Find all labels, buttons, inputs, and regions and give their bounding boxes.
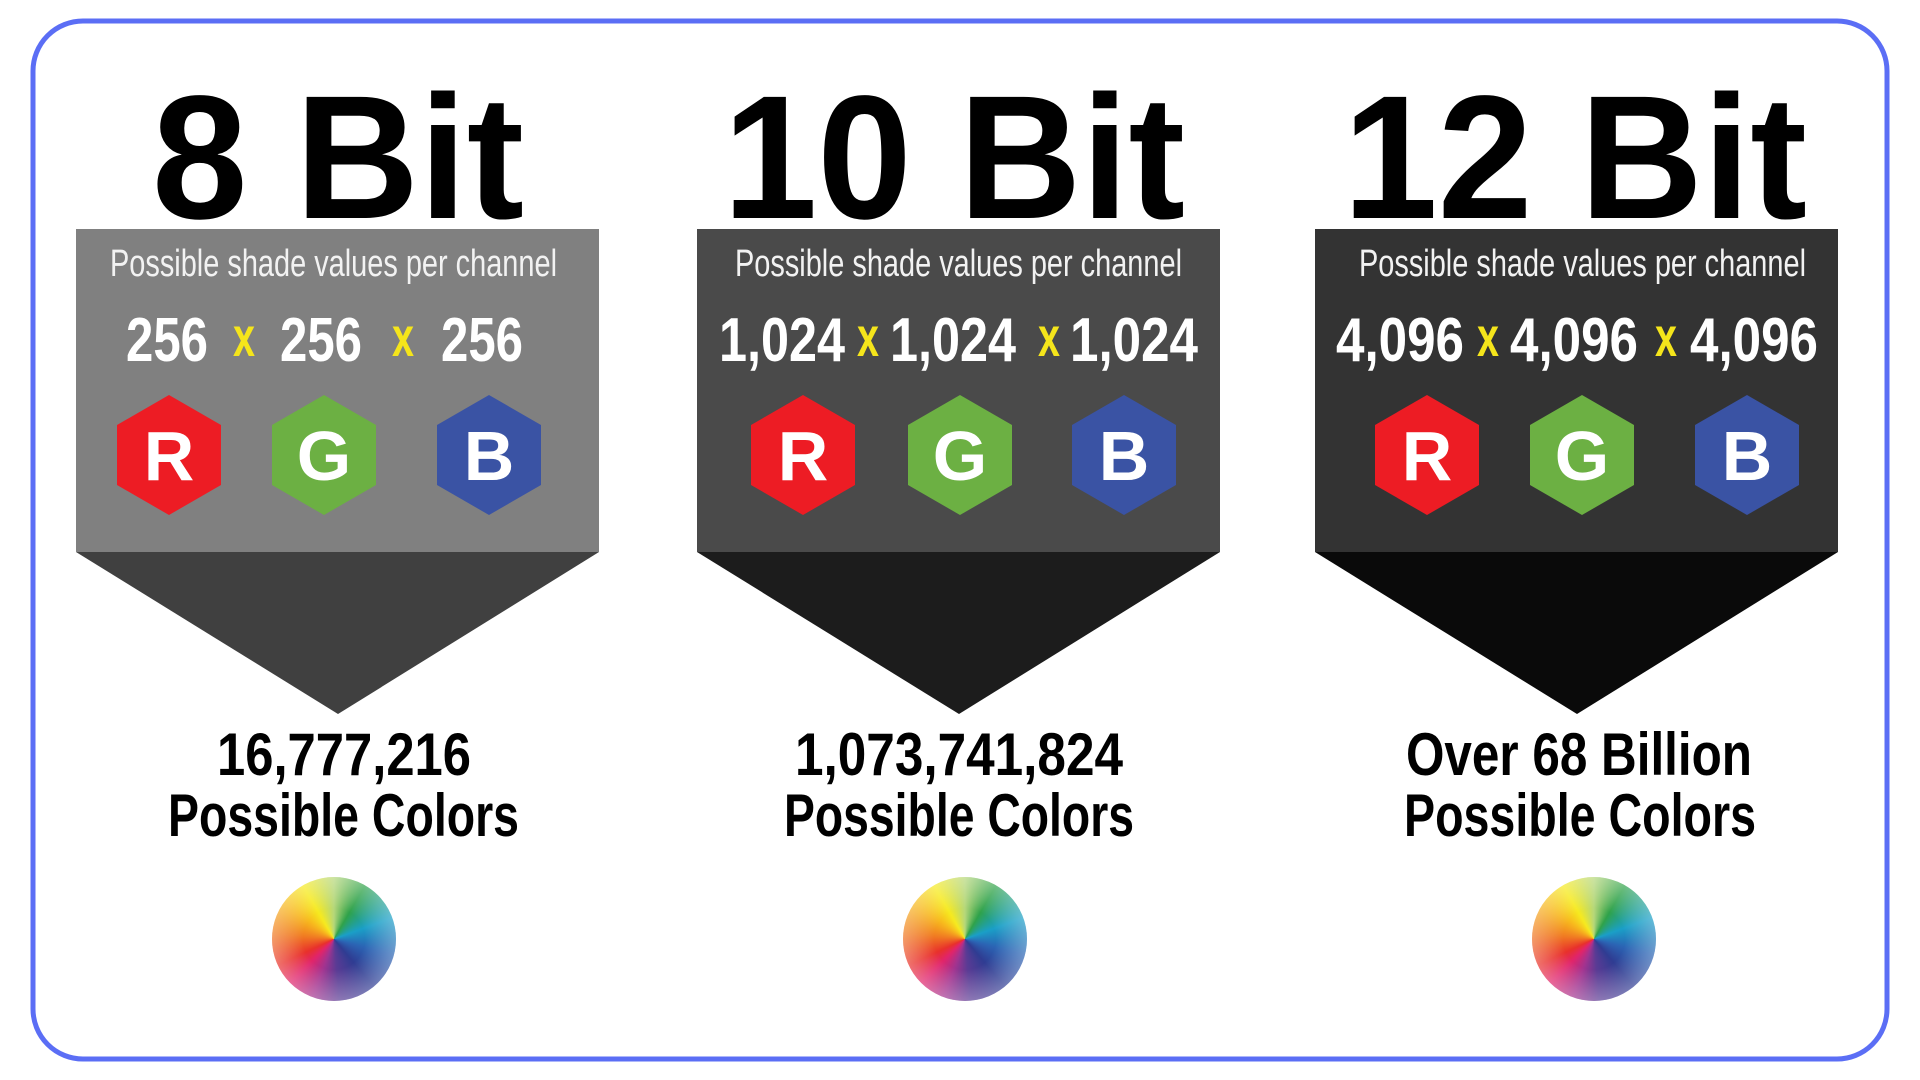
result text: 16,777,216 [217, 721, 471, 788]
panel: 10 bit [697, 60, 1220, 849]
box [697, 229, 1220, 552]
result text: Possible Colors [1404, 782, 1756, 849]
result text [784, 721, 1134, 849]
title: 10 Bit: 10 Bit [723, 60, 1185, 256]
icons: RGB hexagons: B [464, 417, 514, 495]
icon: color wheel 10 bit [903, 877, 1027, 1001]
icons: RGB hexagons: B [1722, 417, 1772, 495]
values: 4,096 [1510, 306, 1638, 375]
icon: color wheel 8 bit [272, 877, 396, 1001]
result text: Possible Colors [784, 782, 1134, 849]
values [1336, 305, 1818, 375]
icon: color wheel 12 bit [1532, 877, 1656, 1001]
values: x [392, 305, 414, 368]
values: 1,024 [719, 306, 845, 375]
values: x [1038, 305, 1060, 368]
box [1315, 229, 1838, 552]
values [719, 305, 1198, 375]
icons: RGB hexagons: G [1555, 417, 1609, 495]
box [76, 229, 599, 552]
result text: Over 68 Billion [1406, 721, 1752, 788]
values: 256 [441, 306, 523, 375]
icons: RGB hexagons: R [144, 417, 194, 495]
icons: RGB hexagons: R [1402, 417, 1452, 495]
arrow [76, 552, 599, 714]
values: 1,024 [1070, 306, 1198, 375]
title: 8 Bit: 8 Bit [152, 60, 524, 256]
subtitle: Possible shade values per channel [110, 243, 557, 285]
arrow [697, 552, 1220, 714]
values: x [857, 305, 879, 368]
title: 12 Bit: 12 Bit [1343, 60, 1807, 256]
icons: RGB hexagons [751, 395, 1176, 515]
values: 256 [280, 306, 362, 375]
values: x [1655, 305, 1677, 368]
values: 4,096 [1690, 306, 1818, 375]
result text: 1,073,741,824 [795, 721, 1124, 788]
icons: RGB hexagons: B [1099, 417, 1149, 495]
values: x [1477, 305, 1499, 368]
result text [168, 721, 519, 849]
values: 1,024 [890, 306, 1016, 375]
panel: 8 bit [76, 60, 599, 849]
values: 256 [126, 306, 208, 375]
values: x [233, 305, 255, 368]
subtitle: Possible shade values per channel [735, 243, 1182, 285]
panel: 12 bit [1315, 60, 1838, 849]
icons: RGB hexagons [1375, 395, 1799, 515]
icons: RGB hexagons [117, 395, 541, 515]
values: 4,096 [1336, 306, 1464, 375]
values [126, 305, 523, 375]
result text: Possible Colors [168, 782, 519, 849]
arrow [1315, 552, 1838, 714]
result text [1404, 721, 1756, 849]
icons: RGB hexagons: G [933, 417, 987, 495]
icons: RGB hexagons: G [297, 417, 351, 495]
icons: RGB hexagons: R [778, 417, 828, 495]
